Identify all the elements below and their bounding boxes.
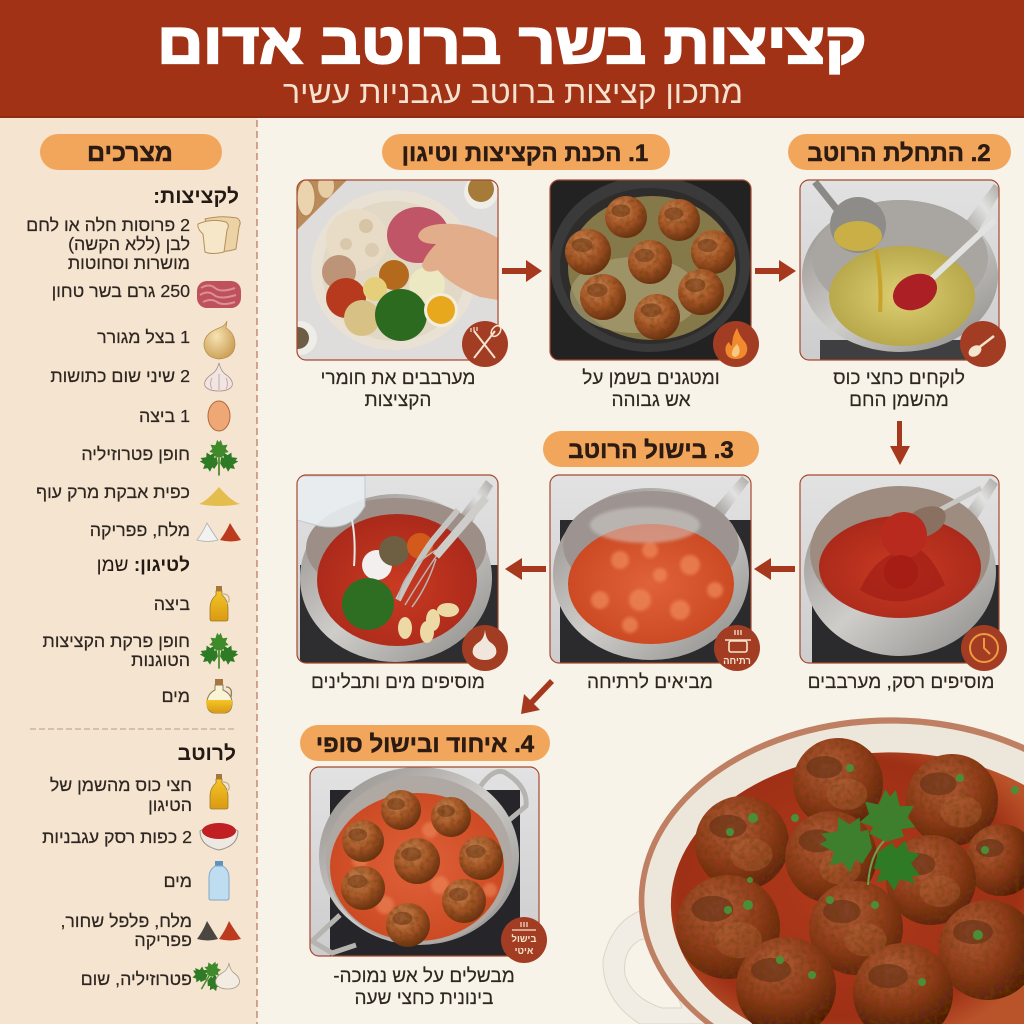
icon: flame badge	[713, 321, 759, 367]
ingredient: parsley and garlic	[81, 953, 239, 998]
arrow: step 1 to 2	[502, 260, 542, 282]
icon: timer badge	[961, 625, 1007, 671]
garnish: chopped herbs	[724, 764, 1019, 986]
ingredient: bread: לבן (ללא הקשה)	[68, 234, 190, 254]
photo: sauce boiling	[550, 475, 751, 663]
bowl handle	[603, 905, 712, 1024]
photo: adding water and spices	[297, 475, 498, 663]
header band	[0, 0, 1024, 118]
section heading: step 1: 1. הכנת הקציצות וטיגון	[402, 140, 648, 167]
panel: ingredients list	[26, 134, 241, 998]
ingredient: oil bottle: ביצה	[154, 594, 190, 614]
ingredient: tomato paste: 2 כפות רסק עגבניות	[42, 827, 192, 847]
caption: water and spices: מוסיפים מים ותבלינים	[311, 672, 485, 693]
caption: boiling: מביאים לרתיחה	[587, 672, 713, 693]
ingredient: parsley	[81, 440, 240, 476]
ingredient: oil: הטיגון	[148, 795, 192, 815]
caption: final cooking	[333, 966, 515, 1009]
ingredient: pepper and paprika	[60, 911, 241, 950]
section heading: step 2	[788, 134, 1011, 170]
bowl rim	[639, 717, 1024, 1024]
ingredient: bread	[26, 215, 240, 273]
ingredient: ground beef	[52, 281, 241, 308]
caption: ladling oil: לוקחים כחצי כוס	[833, 368, 965, 389]
caption: final cooking: בינונית כחצי שעה	[354, 988, 494, 1009]
sauce	[671, 752, 1024, 1024]
ingredient: oil: חצי כוס מהשמן של	[50, 775, 192, 795]
ingredient: pepper and paprika: פפריקה	[134, 930, 192, 950]
subheading: sauce: לרוטב	[178, 742, 236, 765]
ingredient: salt and paprika	[90, 520, 241, 542]
ingredient: salt and paprika: מלח, פפריקה	[90, 520, 190, 540]
icon: slow cooking badge: איטי	[515, 946, 534, 957]
ingredient: onion	[97, 321, 235, 359]
ingredient: garlic: 2 שיני שום כתושות	[50, 366, 190, 386]
subheading: meatballs: לקציצות:	[153, 185, 239, 208]
photo frames	[297, 180, 999, 956]
icon: fork and spoon badge	[462, 321, 508, 367]
arrow: step 5 to 6	[505, 558, 546, 580]
panel: ingredients sidebar background	[0, 118, 257, 1024]
icon: boiling pot badge	[714, 625, 760, 671]
heading: ingredients pill	[40, 134, 222, 170]
arrow: step 2 to 3	[755, 260, 796, 282]
caption: final cooking: מבשלים על אש נמוכה-	[333, 966, 515, 987]
section heading: step 4: 4. איחוד ובישול סופי	[316, 731, 535, 758]
arrow: step 4 to 5	[754, 558, 795, 580]
caption: adding paste: מוסיפים רסק, מערבבים	[808, 672, 994, 693]
ingredient: egg: 1 ביצה	[139, 406, 190, 426]
ingredient: parsley: הטוגנות	[131, 650, 190, 670]
arrow: diagonal to final stage	[521, 679, 554, 714]
ingredient: chicken soup powder	[36, 482, 240, 506]
icon: garlic badge	[462, 625, 508, 671]
icon: spoon badge	[960, 321, 1006, 367]
section heading: step 3	[543, 431, 759, 467]
bowl interior	[644, 724, 1024, 1024]
icon: slow cooking badge: בישול	[512, 934, 536, 945]
ingredient: water bottle: מים	[163, 871, 192, 891]
ingredient: ground beef: 250 גרם בשר טחון	[52, 281, 190, 301]
ingredient: oil jug: מים	[161, 686, 190, 706]
icon: boiling pot badge: רתיחה	[723, 656, 751, 667]
ingredient: chicken soup powder: כפית אבקת מרק עוף	[36, 482, 190, 502]
caption: ladling oil: מהשמן החם	[849, 390, 949, 411]
heading: ingredients pill: מצרכים	[87, 139, 173, 167]
ingredient: parsley and garlic: פטרוזיליה, שום	[81, 969, 192, 989]
section heading: step 4	[300, 725, 550, 761]
photo: mixing ingredients bowl	[298, 180, 498, 360]
ingredient: parsley: חופן פרקת הקציצות	[43, 631, 190, 651]
ingredient: oil	[50, 774, 229, 815]
ingredient: garlic	[50, 363, 232, 391]
caption: mixing: מערבבים את חומרי	[321, 368, 475, 389]
ingredient: bread: 2 פרוסות חלה או לחם	[26, 215, 190, 235]
title: קציצות בשר ברוטב אדום	[157, 11, 867, 75]
caption: frying: אש גבוהה	[611, 390, 691, 411]
subheading: frying: לטיגון: שמן	[97, 555, 190, 576]
ingredient: oil jug	[161, 679, 232, 713]
section heading: step 2: 2. התחלת הרוטב	[807, 140, 991, 167]
photo: ladling oil into pot	[800, 180, 1002, 360]
meatballs	[676, 738, 1024, 1024]
section heading: step 3: 3. בישול הרוטב	[568, 437, 734, 464]
ingredient: oil bottle	[154, 586, 229, 621]
photo: finished dish in bowl	[602, 717, 1024, 1024]
ingredient: parsley: חופן פטרוזיליה	[81, 444, 190, 464]
caption: frying: ומטגנים בשמן על	[582, 368, 720, 389]
caption: mixing	[321, 368, 475, 411]
ingredient: tomato paste	[42, 823, 238, 850]
section heading: step 1	[382, 134, 670, 170]
photo: frying meatballs in pan	[550, 176, 751, 360]
subtitle: מתכון קציצות ברוטב עגבניות עשיר	[283, 74, 743, 110]
photo: meatballs cooking in sauce	[310, 767, 539, 956]
caption: mixing: הקציצות	[365, 390, 431, 411]
ingredient: water bottle	[163, 861, 229, 900]
arrow: down to next row	[890, 421, 910, 465]
caption: ladling oil	[833, 368, 965, 411]
caption: frying	[582, 368, 720, 411]
icon: slow cooking badge	[501, 917, 547, 963]
ingredient: parsley	[43, 631, 240, 670]
ingredient: egg	[139, 401, 230, 431]
ingredient: bread: מושרות וסחוטות	[68, 253, 190, 273]
photo: stirring tomato paste	[800, 475, 999, 663]
garnish: parsley sprig	[815, 787, 932, 901]
ingredient: pepper and paprika: מלח, פלפל שחור,	[60, 911, 192, 931]
ingredient: onion: 1 בצל מגורר	[97, 327, 190, 347]
